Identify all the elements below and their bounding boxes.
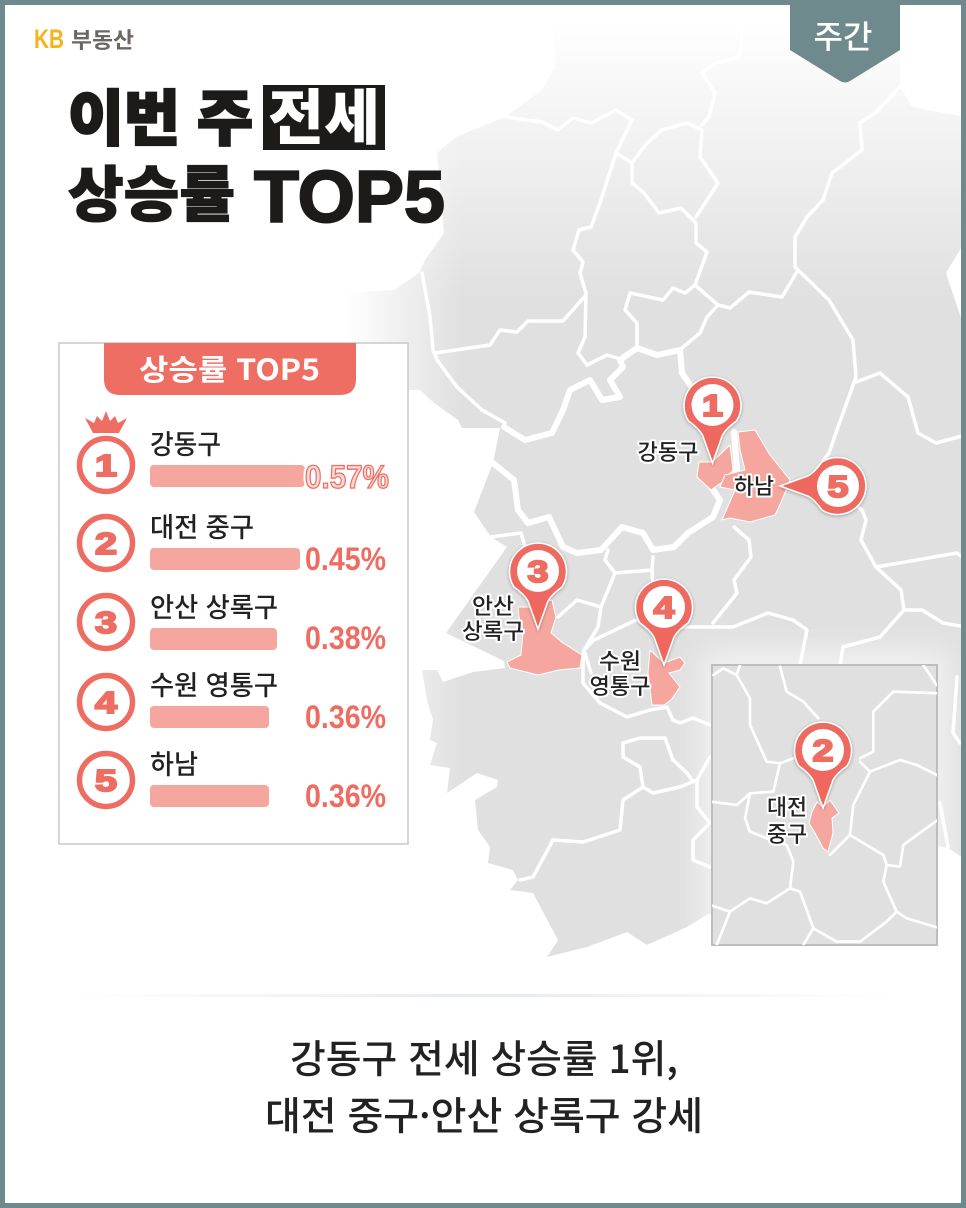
map labels: 강동구 [638,435,698,467]
pin 4 [636,579,692,665]
pin 5 [780,458,866,514]
map labels: 상록구 [462,614,524,646]
panel header: 상승률 TOP5 [139,347,320,389]
map labels: 중구 [767,817,807,849]
map inset: Daejeon [710,665,940,945]
row 1: 강동구 [150,423,221,462]
pin 2: 2 [812,733,834,768]
map labels: 대전 [767,790,807,822]
map labels [462,435,807,849]
row 5 [80,743,386,814]
map labels: 수원 [599,644,641,676]
region: Hanam [720,430,790,522]
row 5: 5 [95,763,117,798]
pin 1 [684,377,741,463]
row 1: 0.57% [305,459,389,495]
summary text [265,1029,703,1142]
panel: TOP5 ranking [59,343,408,844]
row 3: 3 [95,605,117,640]
row 2: 대전 중구 [150,506,254,545]
row 2 [80,506,386,577]
title: 전세 [268,70,380,157]
row 2: 0.45% [305,541,386,577]
summary text: 대전 중구·안산 상록구 강세 [265,1086,703,1142]
row 4: 0.36% [305,699,386,735]
row 5: 하남 [150,743,198,782]
icon: crown [85,411,127,433]
logo: KB 부동산: 부동산 [71,23,134,55]
row 4: 4 [95,685,118,720]
map labels: 영통구 [590,669,650,701]
row 3: 안산 상록구 [150,586,278,625]
map labels: 안산 [472,589,514,621]
pin 4: 4 [654,590,675,625]
title: 이번 주 [68,71,253,158]
title [68,70,445,238]
region: Suwon Yeongtong [648,650,685,705]
pin 1: 1 [702,388,723,423]
map: Korea central region [376,96,961,957]
weekly tab [790,4,900,82]
row 5: 0.36% [305,778,386,814]
row 4: 수원 영통구 [150,664,278,703]
row 3: 0.38% [305,620,386,656]
title: TOP5 [254,157,445,238]
pin 3: 3 [528,554,548,589]
row 3 [80,586,386,656]
summary text: 강동구 전세 상승률 1위, [290,1029,678,1085]
logo: KB 부동산 [34,23,134,55]
map labels: 하남 [734,469,774,501]
weekly tab: 주간 [814,12,872,58]
title: 상승률 [68,147,235,234]
pin 5: 5 [828,469,848,504]
region: Gangdong [697,445,733,490]
logo: KB 부동산: KB [34,24,64,54]
pin 2 [794,722,852,808]
region: Ansan Sangnok [507,600,582,675]
pin 3 [510,543,566,629]
row 1: 0.57% [305,459,389,495]
panel header [104,343,356,395]
row 1: 1 [95,448,117,483]
row 2: 2 [95,526,117,561]
row 1 [80,423,389,495]
row 4 [80,664,386,735]
